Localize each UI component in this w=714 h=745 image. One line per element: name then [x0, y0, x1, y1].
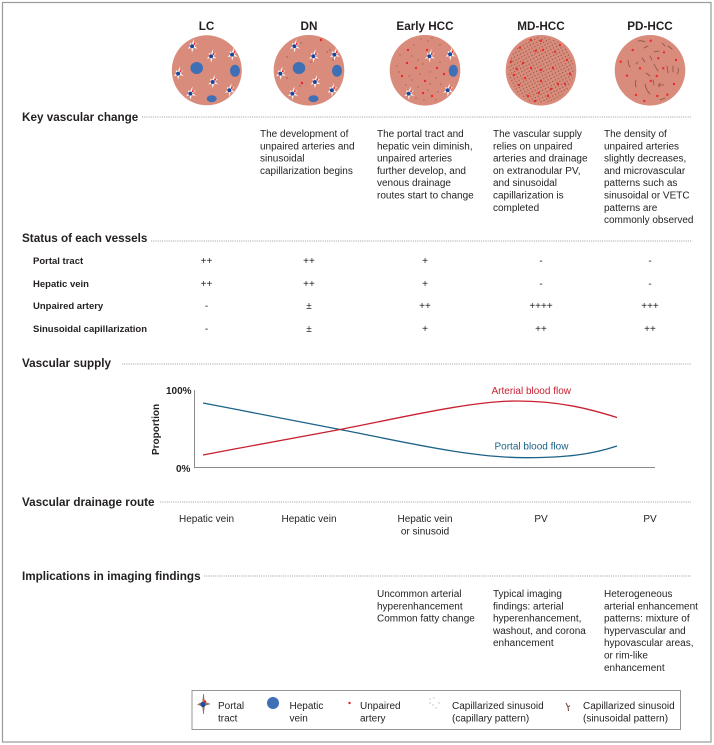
text: DN key change: The development of	[260, 129, 349, 140]
text: Early HCC imaging: hyperenhancement	[377, 601, 463, 612]
text: Early HCC imaging: Common fatty change	[377, 614, 475, 625]
text: PD-HCC imaging: hypovascular areas,	[604, 638, 694, 649]
text: PD-HCC key change: patterns are	[604, 203, 658, 214]
drainage route values: Hepatic vein	[281, 514, 337, 525]
text: PD-HCC key change: and microvascular	[604, 166, 686, 177]
legend label: hepatic vein: vein	[290, 713, 308, 724]
legend icon: unpaired artery	[348, 702, 351, 704]
diagram: LC tissue	[172, 35, 242, 105]
status row: Portal tract: Portal tract	[33, 256, 84, 267]
y axis label: Proportion	[151, 404, 162, 455]
text: PD-HCC imaging: hypervascular and	[604, 626, 686, 637]
status row: Hepatic vein: Hepatic vein	[33, 279, 89, 290]
text: PD-HCC imaging: or rim-like	[604, 650, 648, 662]
section heading: Vascular supply: Vascular supply	[22, 357, 111, 370]
section heading: Vascular drainage route: Vascular drainage route	[22, 496, 155, 509]
text: Early HCC key change: hepatic vein diminish,	[377, 141, 473, 152]
text: MD-HCC imaging: washout, and corona	[492, 626, 586, 637]
text: DN key change: capillarization begins	[260, 166, 353, 177]
text: Early HCC key change: venous drainage	[377, 178, 451, 189]
text: PD-HCC key change: patterns such as	[604, 178, 677, 189]
section heading: Status of each vessels: Status of each vessels	[22, 232, 148, 245]
legend label: portal tract: tract	[218, 713, 238, 724]
status row: Portal tract: -	[648, 256, 652, 267]
diagram: MD-HCC tissue	[505, 34, 577, 106]
text: PD-HCC key change: commonly observed	[604, 215, 693, 226]
text: PD-HCC imaging: arterial enhancement	[604, 601, 698, 612]
diagram: Early HCC tissue	[390, 35, 460, 106]
legend label: unpaired artery: Unpaired	[360, 701, 401, 712]
status row: Sinusoidal capillarization	[33, 324, 656, 335]
text: PD-HCC imaging: Heterogeneous	[604, 589, 672, 600]
text: MD-HCC imaging: enhancement	[493, 638, 554, 649]
drainage route values: Hepatic vein	[179, 514, 234, 525]
legend icon: portal tract	[198, 694, 210, 714]
text: MD-HCC key change: relies on unpaired	[493, 141, 572, 152]
column heading: Early HCC: Early HCC	[396, 20, 454, 33]
status row: Unpaired artery: ±	[306, 301, 312, 312]
text: MD-HCC key change: on extranodular PV,	[493, 166, 580, 177]
legend label: portal tract: Portal	[218, 701, 244, 712]
column heading: LC: LC	[199, 20, 215, 33]
status row: Unpaired artery: +++	[641, 301, 659, 312]
y tick: 100%: 100%	[166, 386, 192, 397]
text: MD-HCC key change: completed	[493, 203, 539, 214]
legend icon: sinusoidal pattern	[566, 703, 570, 711]
column heading: MD-HCC: MD-HCC	[517, 20, 565, 33]
status row: Unpaired artery: ++++	[529, 301, 553, 312]
status row: Sinusoidal capillarization: ±	[306, 324, 312, 335]
text: Early HCC imaging: Uncommon arterial	[377, 589, 461, 600]
status row: Sinusoidal capillarization: +	[422, 324, 428, 335]
text: PD-HCC key change: unpaired arteries	[604, 141, 679, 152]
text: MD-HCC key change: and sinusoidal	[493, 178, 557, 189]
legend icon: capillary pattern	[430, 698, 440, 708]
text: MD-HCC key change: arteries and drainage	[493, 154, 588, 165]
text: DN key change: sinusoidal	[260, 154, 304, 165]
diagram: DN tissue	[274, 35, 344, 106]
status row: Sinusoidal capillarization: ++	[535, 324, 547, 335]
status row: Unpaired artery: -	[205, 301, 208, 312]
drainage route values: PV	[534, 514, 548, 525]
text: MD-HCC imaging: Typical imaging	[493, 589, 562, 600]
section heading: Key vascular change: Key vascular change	[22, 111, 139, 124]
legend label: capillary pattern: Capillarized sinusoid	[452, 701, 544, 712]
text: Early HCC key change: unpaired arteries	[377, 154, 452, 165]
status row: Portal tract: +	[422, 256, 428, 267]
text: Early HCC key change: routes start to change	[377, 190, 474, 202]
text: MD-HCC imaging: findings: arterial	[493, 601, 564, 612]
status row: Unpaired artery: Unpaired artery	[33, 301, 104, 312]
status row: Hepatic vein: +	[422, 279, 428, 290]
status row: Hepatic vein	[33, 279, 652, 290]
status row: Hepatic vein: -	[539, 279, 543, 290]
label: arterial blood flow: Arterial blood flow	[492, 386, 572, 397]
status row: Hepatic vein: ++	[303, 279, 315, 290]
status row: Unpaired artery: ++	[419, 301, 431, 312]
status row: Hepatic vein: ++	[201, 279, 212, 290]
text: PD-HCC key change: sinusoidal or VETC	[604, 190, 690, 202]
diagram: PD-HCC tissue	[615, 35, 685, 106]
chart axes	[194, 390, 655, 468]
status row: Sinusoidal capillarization: ++	[644, 324, 656, 335]
label: portal blood flow: Portal blood flow	[494, 442, 569, 452]
text: PD-HCC imaging: enhancement	[604, 663, 665, 674]
status row: Portal tract: -	[539, 256, 543, 267]
legend icon: hepatic vein	[267, 697, 279, 709]
legend label: capillary pattern: (capillary pattern)	[452, 713, 529, 724]
status row: Unpaired artery	[33, 301, 659, 312]
status row: Portal tract: ++	[303, 256, 315, 267]
column heading: PD-HCC: PD-HCC	[627, 20, 673, 33]
legend label: sinusoidal pattern: Capillarized sinusoid	[583, 701, 675, 712]
text: MD-HCC key change: The vascular supply	[493, 129, 582, 140]
section heading: Implications in imaging findings: Implications in imaging findings	[22, 570, 201, 583]
status row: Sinusoidal capillarization: -	[205, 324, 208, 335]
legend	[192, 690, 680, 730]
drainage route values: or sinusoid	[401, 526, 449, 538]
text: PD-HCC key change: The density of	[604, 129, 667, 140]
text: MD-HCC key change: capillarization is	[493, 190, 564, 202]
status row: Portal tract: ++	[201, 256, 212, 267]
y tick: 0%: 0%	[176, 464, 191, 475]
text: Early HCC key change: The portal tract and	[377, 129, 464, 140]
status row: Sinusoidal capillarization: Sinusoidal capillarization	[33, 324, 147, 335]
text: PD-HCC imaging: patterns: mixture of	[604, 614, 690, 625]
legend label: sinusoidal pattern: (sinusoidal pattern)	[583, 713, 668, 724]
text: PD-HCC key change: slightly decreases,	[604, 154, 686, 165]
text: DN key change: unpaired arteries and	[260, 141, 355, 152]
legend label: unpaired artery: artery	[360, 713, 386, 724]
curve: portal blood flow	[203, 403, 617, 458]
legend label: hepatic vein: Hepatic	[290, 701, 323, 712]
status row: Hepatic vein: -	[648, 279, 652, 290]
column heading: DN: DN	[301, 20, 317, 33]
status row: Portal tract	[33, 256, 652, 267]
text: MD-HCC imaging: hyperenhancement,	[493, 614, 581, 625]
drainage route values	[179, 514, 657, 538]
curve: arterial blood flow	[203, 401, 617, 455]
text: Early HCC key change: further develop, and	[377, 166, 466, 177]
drainage route values: Hepatic vein	[397, 514, 453, 525]
drainage route values: PV	[643, 514, 657, 525]
line chart: vascular supply	[151, 386, 655, 475]
